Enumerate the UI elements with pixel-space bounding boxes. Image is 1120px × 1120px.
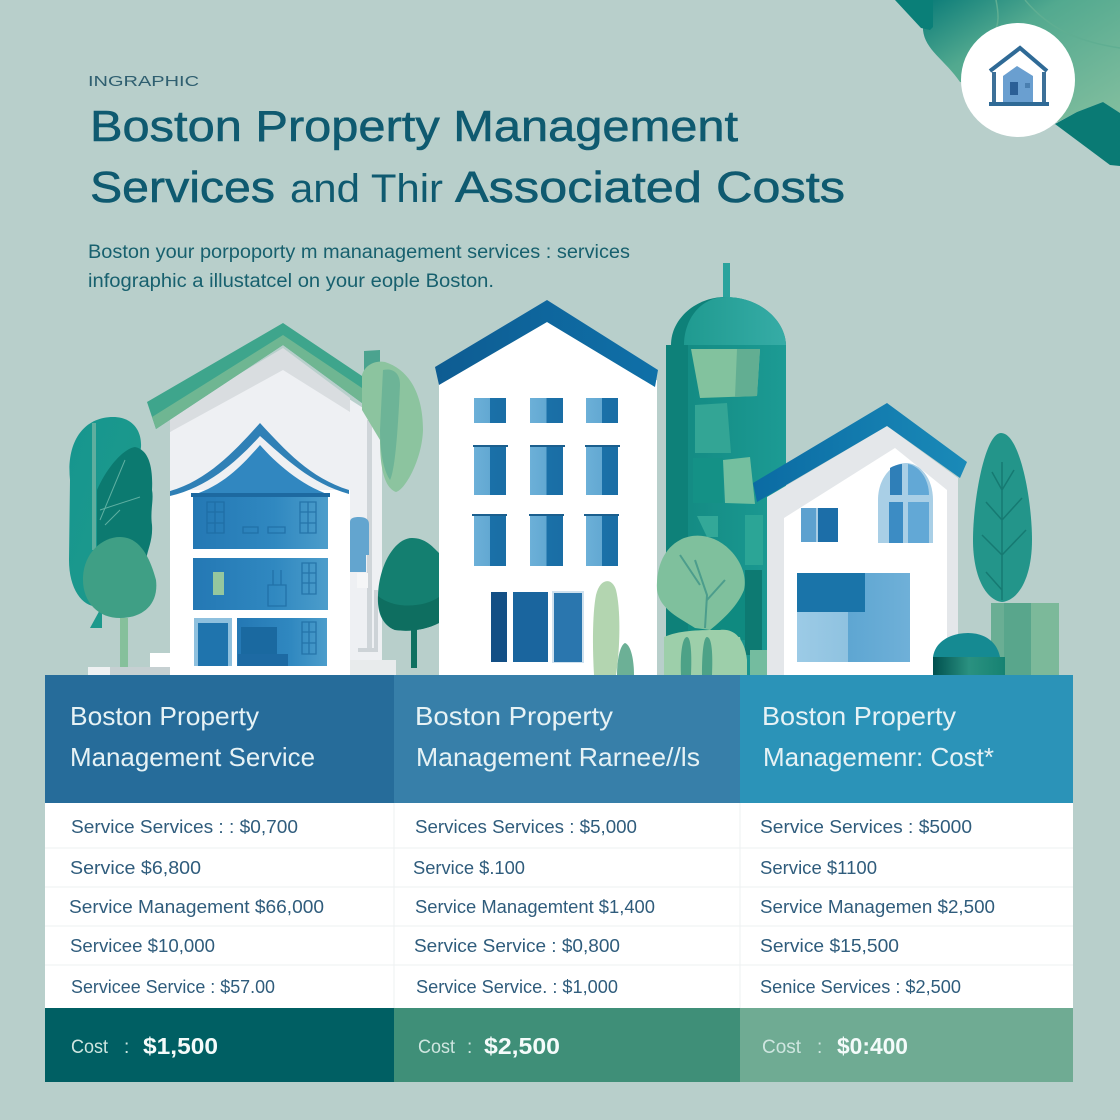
cost: column 3: Cost	[762, 1037, 802, 1058]
header: column 3: Managemenr: Cost*	[763, 742, 994, 772]
cost: column 1: :	[124, 1037, 129, 1058]
tree and bush at tower base	[657, 536, 747, 675]
blue pagoda roof	[170, 423, 349, 497]
tree: cypress, right	[973, 433, 1032, 602]
rows: column 3: Service $15,500	[760, 936, 899, 956]
building: centre with navy roof	[435, 300, 658, 675]
house: right with blue roof	[753, 403, 967, 675]
rows: column 3: Senice Services : $2,500	[760, 977, 961, 997]
tree: tall teal, left	[69, 417, 153, 628]
house: left with green roof	[147, 323, 382, 675]
rows: column 3	[740, 803, 1073, 1008]
rows: column 2: Service Service. : $1,000	[416, 977, 618, 997]
cost: column 1: Cost	[71, 1037, 109, 1058]
tree: round green, left	[83, 537, 156, 667]
shrub dome	[933, 633, 1005, 675]
rows: column 2: Service Service : $0,800	[414, 936, 620, 956]
title: Services	[90, 163, 275, 212]
header: column 1	[45, 675, 394, 803]
table: column 3	[740, 675, 1073, 1082]
intro text: Boston your porpoporty m mananagement services : services	[88, 242, 630, 263]
rows: column 3: Service Managemen $2,500	[760, 897, 995, 917]
header: column 2: Boston Property	[415, 701, 613, 731]
cost: column 2: $2,500	[484, 1033, 560, 1059]
rows: column 2: Service Managemtent $1,400	[415, 897, 655, 917]
rows: column 1: Service $6,800	[70, 858, 201, 878]
tower: teal silo with dome	[666, 263, 786, 675]
planter box	[991, 603, 1059, 675]
title: Associated Costs	[455, 163, 845, 212]
rows: column 2: Services Services : $5,000	[415, 817, 637, 837]
table: column 2	[394, 675, 740, 1082]
decorative corner foliage	[895, 0, 1120, 166]
rows: column 1: Servicee Service : $57.00	[71, 977, 275, 997]
ground strips	[88, 653, 933, 675]
header: column 2: Management Rarnee//ls	[416, 742, 700, 772]
rows: column 1: Servicee $10,000	[70, 936, 215, 956]
illustration: street of buildings	[69, 263, 1059, 675]
cost: column 2	[394, 1008, 740, 1082]
intro text: infographic a illustatcel on your eople Boston.	[88, 271, 494, 292]
header: column 2	[394, 675, 740, 803]
table: column 1	[45, 675, 394, 1082]
chimney and leaf beside left house	[362, 350, 423, 492]
rows: column 1: Service Services : : $0,700	[71, 817, 298, 837]
rows: column 1	[45, 803, 394, 1008]
large window	[797, 573, 910, 662]
rows: column 3: Service Services : $5000	[760, 817, 972, 837]
cost: column 2: Cost	[418, 1037, 456, 1058]
small square window	[801, 508, 838, 542]
cost: column 1: $1,500	[143, 1033, 218, 1059]
eyebrow label: INGRAPHIC	[88, 73, 199, 90]
entrance door	[491, 591, 584, 663]
arched window	[878, 463, 933, 543]
header: column 3: Boston Property	[762, 701, 956, 731]
trees: pale cypress at centre building	[593, 581, 634, 675]
title: and Thir	[290, 167, 443, 211]
rows: column 1: Service Management $66,000	[69, 897, 324, 917]
rows: column 3: Service $1100	[760, 858, 877, 878]
cost: column 1	[45, 1008, 394, 1082]
header: column 1: Boston Property	[70, 701, 259, 731]
title	[90, 102, 845, 212]
title: Boston Property Management	[90, 102, 738, 151]
cost: column 2: :	[467, 1037, 472, 1058]
rows: column 2: Service $.100	[413, 858, 525, 878]
icon: house in white circle	[961, 23, 1075, 137]
cost: column 3	[740, 1008, 1073, 1082]
tree: dark green, centre	[378, 538, 439, 668]
side blue window	[350, 517, 376, 650]
cost: column 3: :	[817, 1037, 822, 1058]
header: column 3	[740, 675, 1073, 803]
windows grid	[472, 398, 620, 566]
cost: column 3: $0:400	[837, 1033, 908, 1059]
header: column 1: Management Service	[70, 742, 315, 772]
intro text	[88, 242, 630, 292]
floors with windows	[193, 497, 328, 666]
rows: column 2	[394, 803, 740, 1008]
